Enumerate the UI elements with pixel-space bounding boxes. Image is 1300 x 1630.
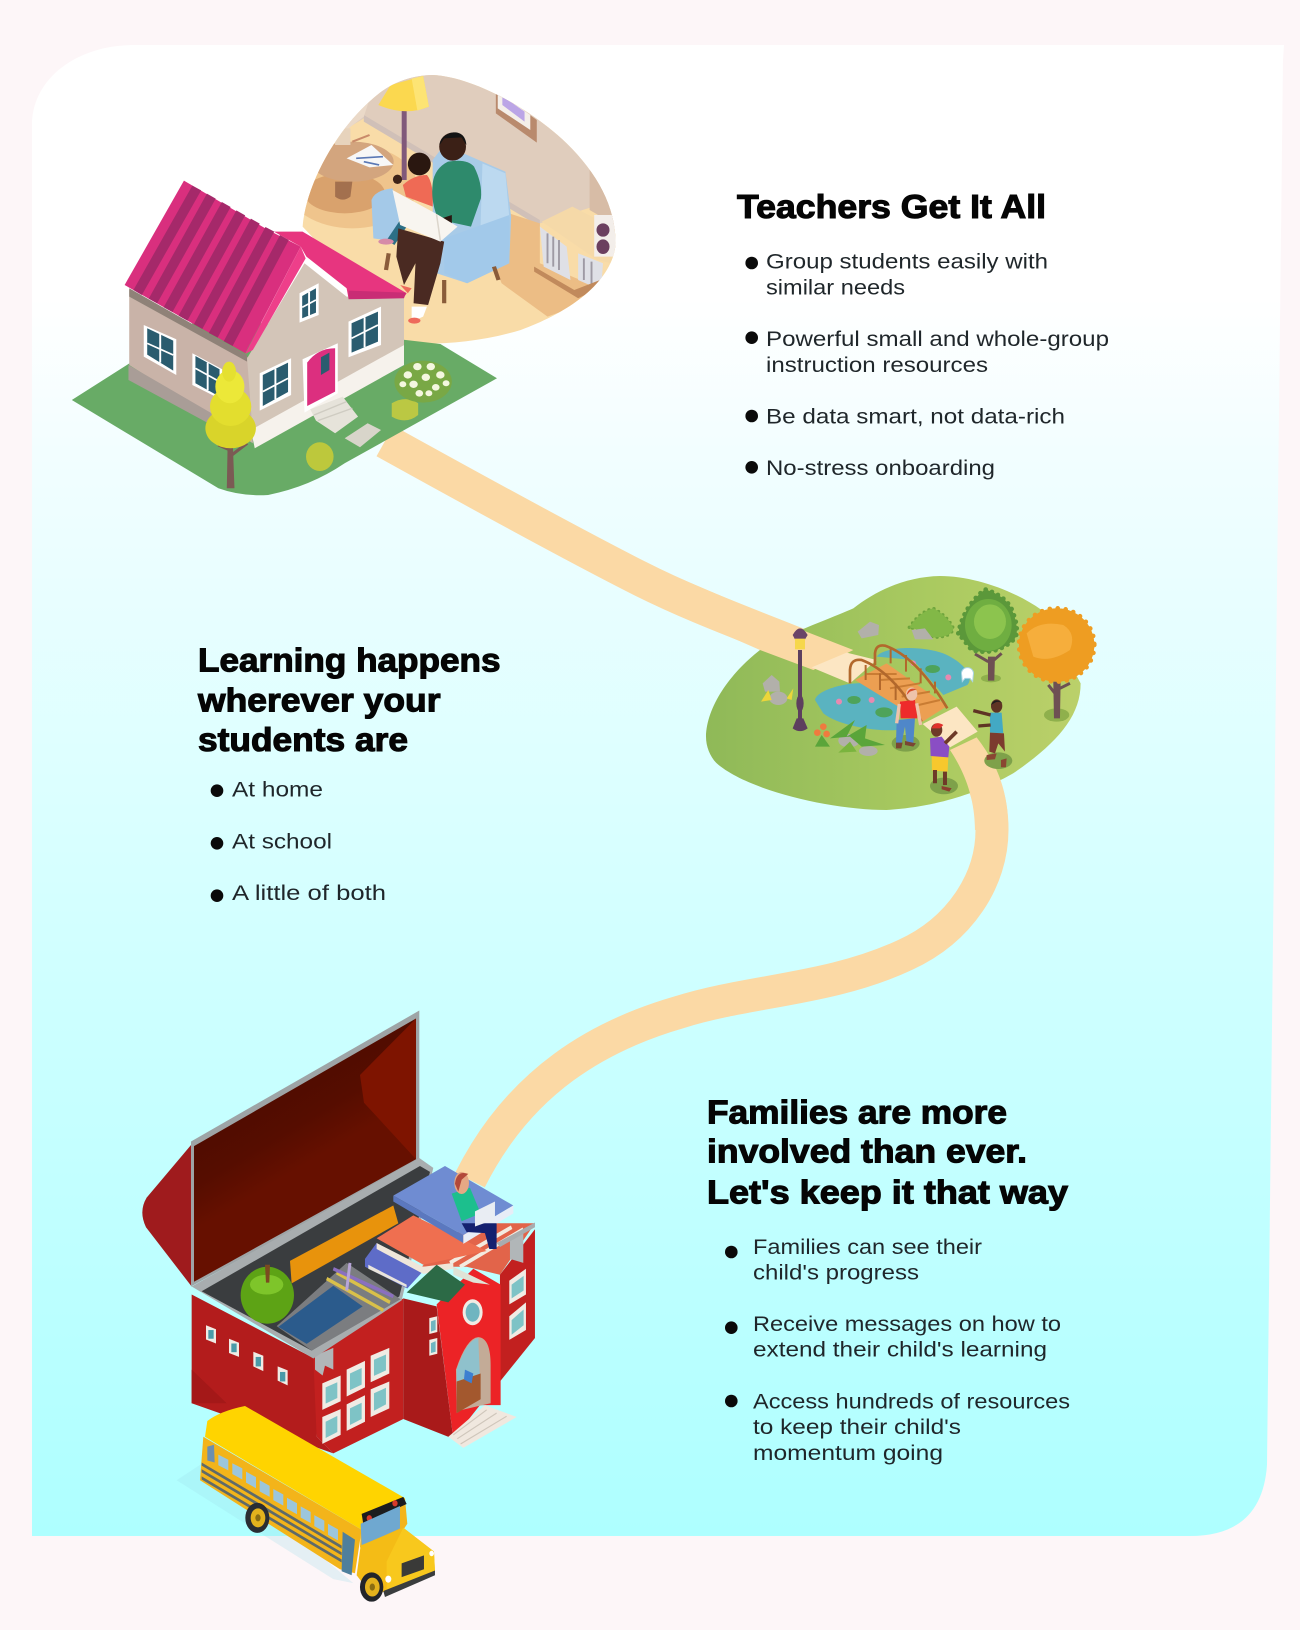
- floor lamp: [402, 107, 407, 180]
- school entrance block: [403, 1222, 535, 1448]
- person with laptop on books: [452, 1172, 497, 1249]
- book stack: [365, 1166, 535, 1289]
- bullet list: Access hundreds of resources: [753, 1390, 1070, 1413]
- bush: [909, 608, 953, 639]
- bullet list: Group students easily with: [766, 251, 1048, 274]
- laptop: [393, 190, 458, 242]
- child: [388, 221, 406, 245]
- bullet list: [745, 251, 1109, 480]
- orange tree: [1019, 608, 1094, 722]
- armchair: [433, 145, 511, 283]
- bullet list: child's progress: [753, 1261, 919, 1284]
- illustration: park with bridge and children: [680, 576, 1094, 830]
- bullet list: Be data smart, not data-rich: [766, 405, 1065, 428]
- winding path: house to park: [385, 441, 815, 652]
- windows: [144, 283, 381, 411]
- inside of box: [192, 1158, 433, 1359]
- heading: students are: [198, 721, 408, 758]
- park lawn: [706, 576, 1081, 810]
- rear wheel: [245, 1503, 269, 1533]
- bullet list: Families can see their: [753, 1236, 982, 1259]
- open lid: [191, 1011, 419, 1287]
- bus shadow: [177, 1461, 353, 1583]
- heading: Learning happens: [198, 641, 500, 678]
- room bubble: parent and child on armchair: [302, 75, 616, 344]
- pond right: [877, 648, 970, 695]
- small windows: [206, 1325, 288, 1385]
- bridge: [850, 645, 947, 722]
- bullet list: A little of both: [232, 882, 386, 905]
- radiator shelf: [542, 206, 616, 262]
- school bus: [200, 1406, 435, 1602]
- front steps: [310, 397, 358, 433]
- illustration: school as open lunchbox with bus: [142, 1011, 535, 1602]
- round shrub: [306, 442, 334, 471]
- bullet list: Receive messages on how to: [753, 1313, 1061, 1336]
- heading: Families are more: [707, 1093, 1007, 1130]
- heading: wherever your: [197, 682, 441, 719]
- bus cab: [360, 1498, 407, 1548]
- house: [125, 181, 407, 448]
- main roof: [125, 181, 301, 353]
- bullet list: similar needs: [766, 277, 905, 300]
- lamp post: [793, 628, 808, 731]
- yellow tree: [205, 362, 256, 488]
- large windows: [322, 1348, 389, 1444]
- text block: Learning happens wherever your students are: [197, 641, 500, 905]
- stepping stones: [345, 423, 381, 447]
- person: child in teal shirt: [973, 699, 1012, 769]
- side gable roof: [274, 232, 407, 298]
- heading: [707, 1093, 1069, 1210]
- heading: Teachers Get It All: [737, 188, 1046, 225]
- entrance steps: [448, 1405, 517, 1448]
- lily pads: [836, 661, 951, 717]
- blue tablet and pencils: [278, 1263, 393, 1344]
- building left flap: [142, 1144, 192, 1287]
- front door: [303, 343, 338, 413]
- pond left: [815, 683, 902, 730]
- text block: Teachers Get It All: [737, 188, 1109, 480]
- flowers and plants: [814, 720, 885, 753]
- heading: [197, 641, 500, 758]
- bullet list: [211, 779, 386, 905]
- bullet list: Powerful small and whole-group: [766, 328, 1109, 351]
- rocks: [763, 622, 879, 756]
- bullet list: momentum going: [753, 1442, 943, 1465]
- bullet list: No-stress onboarding: [766, 457, 995, 480]
- green tree: [958, 589, 1017, 682]
- ball: [961, 668, 973, 682]
- lawn: [72, 317, 497, 495]
- bullet list: [725, 1236, 1070, 1465]
- winding path: park to school: [470, 745, 992, 1180]
- heading: Let's keep it that way: [707, 1173, 1069, 1210]
- yellow grass tufts: [761, 688, 793, 702]
- school long wall: [192, 1294, 403, 1453]
- illustration: house with family room bubble: [72, 70, 624, 495]
- path through park: [680, 578, 1008, 830]
- bullet list: At home: [232, 779, 323, 802]
- person: adult in red shirt: [892, 687, 921, 752]
- bullet list: At school: [232, 830, 332, 853]
- text block: Families are more involved than ever: [707, 1093, 1070, 1465]
- bullet list: instruction resources: [766, 354, 988, 377]
- shoes: [412, 306, 427, 318]
- bullet list: extend their child's learning: [753, 1339, 1047, 1362]
- shrub with white flowers: [392, 361, 452, 420]
- picture frame: [496, 90, 537, 143]
- heading: involved than ever.: [707, 1133, 1027, 1170]
- person: child in purple shirt: [930, 723, 958, 794]
- apple: [241, 1265, 294, 1324]
- bullet list: to keep their child's: [753, 1416, 961, 1439]
- parent: [432, 161, 481, 227]
- side table: [311, 142, 394, 182]
